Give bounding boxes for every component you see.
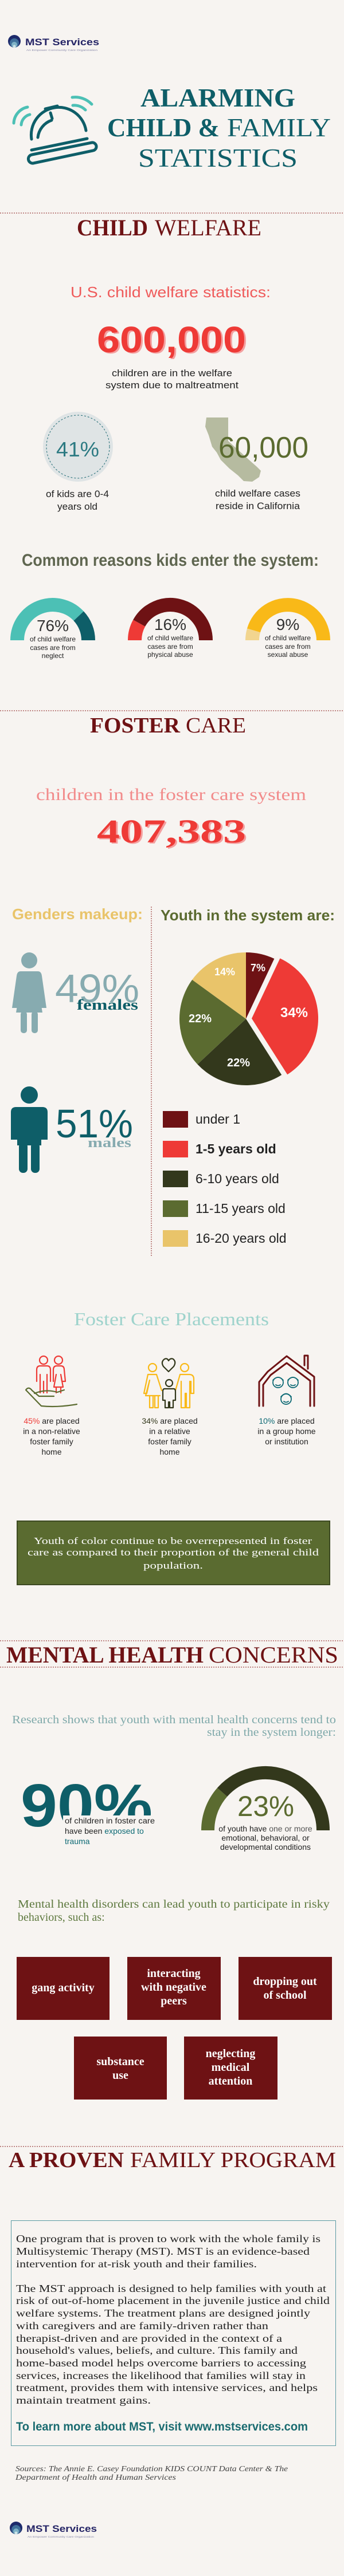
box: neglecting medical (184, 2037, 277, 2100)
heading: foster care: CARE (186, 714, 246, 738)
gauge: neglect: neglect (42, 652, 64, 660)
box: negative peers (127, 1957, 221, 2020)
gauge: neglect: 76% (37, 617, 69, 635)
subheading: common reasons: Common reasons kids enter the system: (22, 551, 319, 570)
box: substance use (74, 2037, 167, 2100)
stat: 60,000 California: reside in California (216, 501, 300, 511)
subheading: foster care placements: Foster Care Placements (74, 1309, 269, 1329)
text: placement captions: 34% are placed (142, 1416, 198, 1425)
title: ALARMING (140, 83, 295, 112)
pie chart: youth ages: 34% (280, 1005, 308, 1021)
legend: age groups: 16-20 years old (196, 1231, 287, 1246)
box: dropping out: of school (264, 1989, 307, 2002)
subheading: children in foster care: children in the foster care system (36, 785, 306, 804)
subheading: youth in system: Youth in the system are: (161, 907, 335, 924)
logo top: An Empower Community Care Organization (26, 49, 98, 52)
callout: youth of color: population. (143, 1560, 203, 1571)
stat: 41%: of kids are 0-4 (46, 489, 109, 499)
gauge: physical abuse: cases are from (147, 643, 193, 651)
text: sources: Department of Health and Human Services (15, 2473, 176, 2482)
text box: MST program: home-based model helps overcome barriers to accessing (16, 2357, 306, 2369)
box: gang activity: gang activity (32, 1982, 95, 1994)
title: FAMILY (227, 113, 331, 142)
text: 600,000 caption (105, 368, 239, 391)
box: substance use: substance (96, 2055, 144, 2068)
gauge: sexual abuse: cases are from (265, 643, 311, 651)
text: placement captions: home (159, 1447, 180, 1456)
legend: age groups: 1-5 years old (196, 1141, 276, 1156)
gauge: 23% conditions: 23% (237, 1790, 294, 1822)
gauge: physical abuse (135, 605, 206, 659)
text: placement captions: or institution (265, 1437, 308, 1446)
gauge: sexual abuse: of child welfare (265, 634, 311, 642)
text: research shows (12, 1714, 336, 1739)
stat: 407,383 (97, 813, 248, 851)
box: negative peers: with negative (141, 1981, 206, 1994)
heading: child welfare: CHILD (77, 215, 148, 241)
icon: group home (259, 1356, 314, 1406)
text: sources (15, 2464, 288, 2482)
logo top: MST Services (25, 37, 99, 48)
gauge: physical abuse: of child welfare (147, 634, 193, 642)
text box: MST program: The MST approach is designed to help families with youth at (16, 2283, 326, 2294)
heading: a proven family program (9, 2148, 336, 2172)
legend: age groups: under 1 (196, 1112, 240, 1126)
text: placement captions: in a group home (257, 1427, 316, 1436)
gauge: neglect: of child welfare (30, 635, 76, 643)
stat: 51% males: 51% (56, 1101, 133, 1146)
gauge: 23% conditions (208, 1773, 323, 1852)
logo bottom: MST Services (26, 2523, 97, 2534)
legend: age groups (163, 1111, 287, 1247)
box: neglecting medical: attention (209, 2075, 252, 2087)
box: negative peers: interacting (147, 1967, 201, 1980)
text box: MST program: welfare systems. The treatment plans are designed jointly (16, 2307, 310, 2319)
stat: 51% males: males (88, 1136, 131, 1151)
text: 600,000 caption: system due to maltreatment (105, 380, 239, 391)
logo bottom: An Empower Community Care Organization (28, 2535, 95, 2538)
text: mental health disorders (18, 1898, 330, 1924)
heading: mental health concerns (6, 1642, 338, 1668)
icon: female figure (12, 952, 46, 1033)
text: placement captions: in a relative (149, 1427, 190, 1436)
gauge: 23% conditions: of youth have one or more (218, 1824, 312, 1833)
icon: kids in hand (26, 1356, 77, 1407)
gauge: neglect: cases are from (30, 644, 76, 652)
text: research shows: stay in the system longer: (207, 1726, 336, 1739)
text: placement captions: foster family (148, 1437, 191, 1446)
stat: 407,383: 407,383 (97, 813, 246, 850)
gauge: sexual abuse: sexual abuse (268, 651, 308, 659)
text: mental health disorders: behaviors, such as: (18, 1911, 105, 1924)
pie chart: youth ages: 22% (189, 1013, 212, 1025)
gauge: physical abuse: 16% (154, 616, 186, 633)
stat: 407,383: 407,383 (99, 814, 248, 851)
subheading: US stats: U.S. child welfare statistics: (71, 283, 271, 301)
icon: bell (14, 97, 96, 163)
heading: foster care (90, 714, 246, 738)
text box: MST program (11, 2221, 336, 2445)
stat: 49% females: females (77, 996, 138, 1013)
pie chart: youth ages: 7% (251, 962, 265, 974)
stat: 90% trauma: have been exposed to (65, 1826, 144, 1836)
pie chart: youth ages: 14% (214, 966, 235, 978)
text box: MST program: with caregivers and are family-driven rather than (16, 2320, 268, 2331)
text: placement captions: in a non-relative (23, 1427, 80, 1436)
stat: 60,000 California: 60,000 (218, 431, 308, 464)
text box: MST program: services, increases the likelihood that families will stay in (16, 2370, 306, 2381)
box: substance use: use (112, 2069, 128, 2082)
text box: MST program: To learn more about MST, visit www.mstservices.com (16, 2420, 308, 2433)
text box: MST program: intervention for at-risk youth and their families. (16, 2258, 257, 2270)
text: 600,000 caption: children are in the welfare (112, 368, 232, 379)
title (107, 83, 331, 172)
text: placement captions: 10% are placed (259, 1416, 315, 1425)
subheading: genders makeup: Genders makeup: (12, 905, 143, 923)
gauge: neglect (17, 605, 88, 660)
stat: 41% (43, 412, 113, 512)
heading: mental health concerns: MENTAL HEALTH (6, 1642, 204, 1668)
callout: youth of color (17, 1521, 330, 1585)
heading: foster care: FOSTER (90, 714, 181, 738)
stat: 600,000: 600,000 (99, 320, 248, 361)
text: placement captions: 45% are placed (24, 1416, 80, 1425)
heading: child welfare (77, 215, 261, 241)
text: placement captions: foster family (30, 1437, 73, 1446)
text box: MST program: risk of out-of-home placement in the juvenile justice and child (16, 2295, 330, 2306)
stat: 90% trauma: 90% (21, 1772, 153, 1840)
box: negative peers: peers (161, 1995, 187, 2007)
text box: MST program: household's values, beliefs, and culture. This family and (16, 2345, 298, 2356)
text box: MST program: Multisystemic Therapy (MST). MST is an evidence-based (16, 2246, 310, 2258)
logo top (8, 35, 99, 52)
callout: youth of color: Youth of color continue to be overrepresented in foster (34, 1535, 312, 1546)
gauge: 23% conditions: emotional, behavioral, or (221, 1833, 310, 1842)
box: dropping out: dropping out (253, 1975, 317, 1988)
stat: 90% trauma: of children in foster care (65, 1816, 155, 1825)
gauge: sexual abuse (252, 605, 323, 659)
text box: MST program: One program that is proven to work with the whole family is (16, 2233, 320, 2244)
callout: youth of color: care as compared to their proportion of the general child (28, 1547, 319, 1558)
heading: a proven family program: FAMILY PROGRAM (130, 2148, 336, 2172)
stat: 600,000: 600,000 (97, 319, 246, 360)
gauge: physical abuse: physical abuse (147, 651, 193, 659)
legend: age groups: 11-15 years old (196, 1201, 286, 1216)
text: sources: Sources: The Annie E. Casey Foundation KIDS COUNT Data Center & The (15, 2464, 288, 2473)
box: neglecting medical: medical (212, 2061, 250, 2074)
logo bottom (10, 2522, 97, 2538)
stat: 90% trauma: trauma (65, 1837, 90, 1846)
pie chart: youth ages: 22% (227, 1057, 250, 1069)
legend: age groups: 6-10 years old (196, 1171, 279, 1186)
pie chart: youth ages (179, 952, 318, 1085)
text box: MST program: therapist-driven and are provided in the context of a (16, 2333, 282, 2344)
icon: family with heart (144, 1358, 194, 1408)
box: neglecting medical: neglecting (206, 2047, 255, 2060)
stat: 41%: years old (57, 501, 97, 512)
text: placement captions (23, 1416, 316, 1456)
stat: 60,000 California: child welfare cases (215, 488, 300, 499)
stat: 60,000 California (205, 417, 308, 511)
gauge: sexual abuse: 9% (276, 616, 299, 633)
heading: child welfare: WELFARE (155, 215, 261, 241)
risky behaviour boxes (17, 1957, 332, 2100)
box: gang activity (17, 1957, 110, 2020)
text: placement captions: home (41, 1447, 62, 1456)
title: STATISTICS (138, 143, 298, 172)
icon: male figure (11, 1086, 48, 1173)
stat: 41%: 41% (56, 438, 99, 461)
gauge: 23% conditions: developmental conditions (220, 1842, 311, 1852)
heading: a proven family program: A PROVEN (9, 2148, 124, 2172)
box: dropping out (239, 1957, 332, 2020)
stat: 49% females: 49% (55, 966, 139, 1011)
text box: MST program: maintain treatment gains. (16, 2394, 151, 2406)
text: research shows: Research shows that youth with mental health concerns tend to (12, 1714, 336, 1726)
title: CHILD & (107, 113, 220, 142)
text box: MST program: treatment, provides them with intensive services, and helps (16, 2382, 318, 2393)
heading: mental health concerns: CONCERNS (209, 1642, 338, 1668)
text: mental health disorders: Mental health disorders can lead youth to participate in risky (18, 1898, 330, 1911)
